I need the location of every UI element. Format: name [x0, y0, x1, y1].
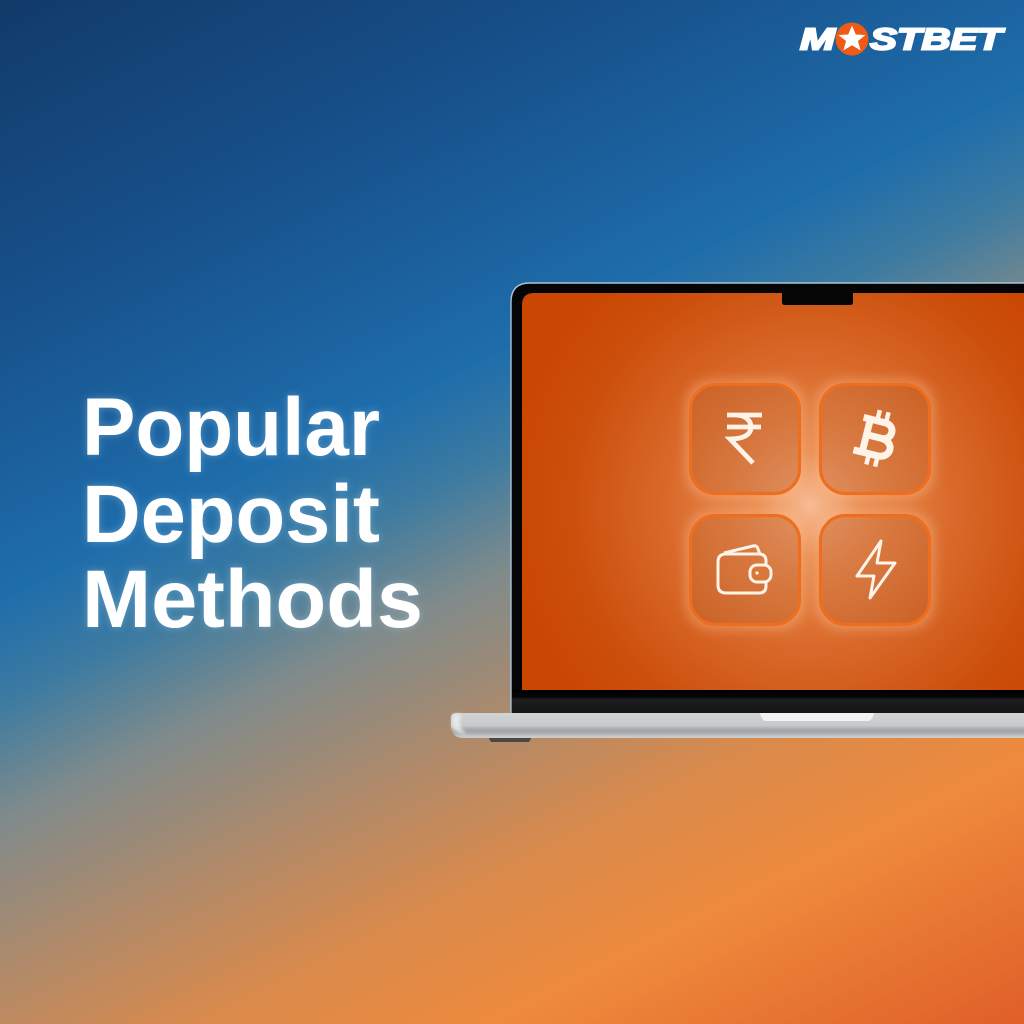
title glow: Methods: [82, 554, 423, 645]
icon: wallet: [718, 546, 771, 593]
logo: Mostbet: [800, 22, 1006, 56]
tile glow: [686, 380, 934, 629]
laptop foot: [488, 737, 532, 742]
laptop: [451, 283, 1024, 742]
icon: lightning bolt: [857, 541, 895, 598]
title glow: Popular: [82, 382, 380, 473]
logo wordmark left letter: M: [800, 22, 837, 56]
title text: Popular: [82, 382, 380, 473]
title: [82, 382, 423, 645]
title text: Methods: [82, 554, 423, 645]
icon: bitcoin: [851, 406, 899, 469]
tile: wallet: [690, 516, 800, 624]
title text: [82, 382, 423, 645]
title text: Deposit: [82, 469, 380, 560]
icon: rupee: [727, 415, 762, 463]
laptop chin: [512, 690, 1024, 713]
laptop base: [451, 713, 1024, 738]
trackpad notch: [760, 713, 874, 721]
title glow: [82, 382, 423, 645]
tile: bitcoin: [820, 384, 930, 494]
base left highlight: [452, 714, 466, 734]
laptop lid: [511, 283, 1024, 716]
tile: lightning: [820, 516, 930, 624]
logo wordmark right letters: STBET: [870, 22, 1006, 56]
title glow: Deposit: [82, 469, 380, 560]
laptop screen: [522, 293, 1024, 690]
tile: rupee: [690, 384, 800, 494]
logo star badge: [836, 22, 868, 56]
camera notch: [782, 293, 853, 305]
